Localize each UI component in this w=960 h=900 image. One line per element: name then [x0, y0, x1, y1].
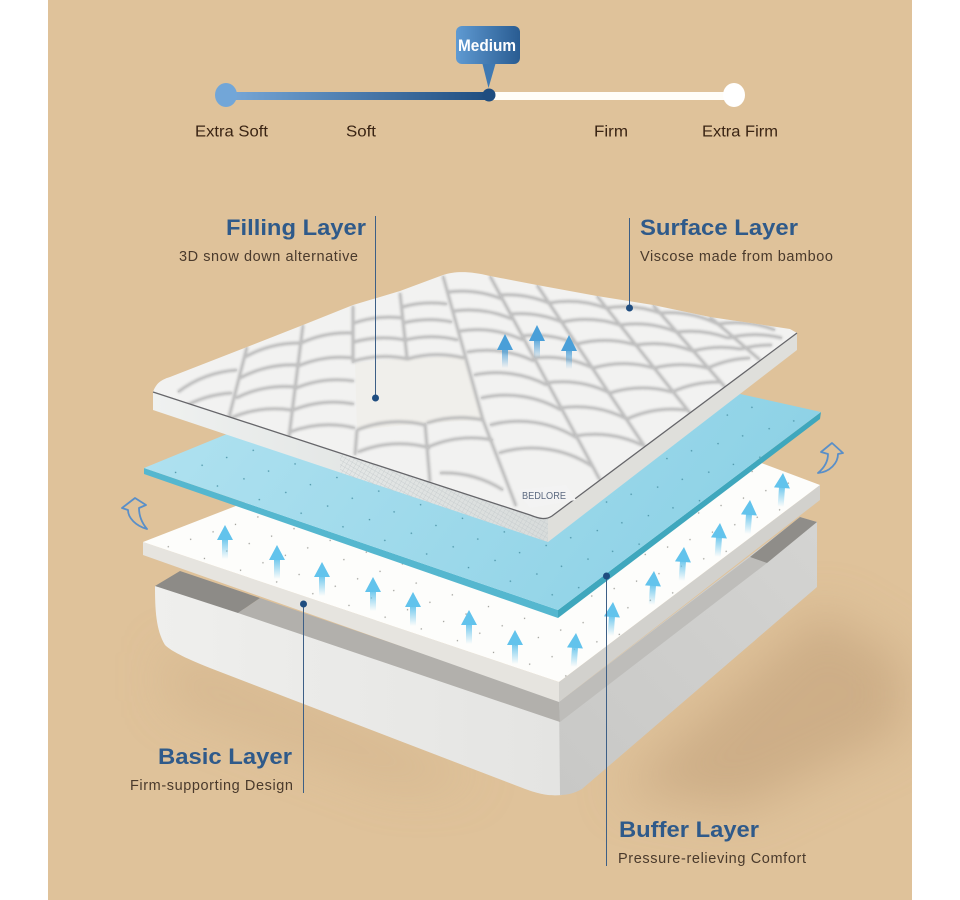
callout: surface layer: Surface Layer: [640, 215, 798, 240]
callout: buffer layer: Buffer Layer: [619, 817, 759, 842]
firmness scale: [195, 26, 778, 140]
piping: [153, 333, 797, 519]
filling window: [355, 356, 483, 430]
ground shadow: [644, 616, 910, 812]
scale labels: Extra Firm: [702, 124, 778, 140]
medium callout: Medium: [458, 37, 516, 55]
callout: basic layer: [130, 600, 307, 794]
callout: surface layer: Viscose made from bamboo: [640, 249, 833, 265]
scale labels: [195, 124, 778, 140]
brand label: [515, 485, 576, 508]
callout: filling layer: [179, 215, 379, 402]
callout: surface layer: [626, 215, 833, 312]
scale labels: Soft: [346, 124, 377, 140]
blue gel foam layer: [144, 334, 821, 618]
callout: filling layer: 3D snow down alternative: [179, 249, 358, 265]
quilting seams: [178, 276, 782, 506]
callout: basic layer: Firm-supporting Design: [130, 778, 293, 794]
callout: buffer layer: Pressure-relieving Comfort: [618, 851, 806, 867]
base layer block: [155, 517, 817, 795]
brand label: BEDLORE: [522, 491, 566, 502]
curved arrow right: [818, 443, 843, 473]
white foam airflow arrows: [217, 472, 791, 667]
scale track: [215, 83, 745, 107]
curved arrow left: [122, 498, 147, 529]
scale labels: Firm: [594, 124, 628, 140]
callout: buffer layer: [603, 572, 806, 867]
grey support strip: [155, 517, 817, 722]
callout: basic layer: Basic Layer: [158, 744, 292, 769]
callout: filling layer: Filling Layer: [226, 215, 366, 240]
quilted surface topper: [153, 272, 797, 542]
topper side edges: [153, 332, 797, 542]
white foam layer: [143, 384, 820, 702]
scale labels: Extra Soft: [195, 124, 269, 140]
medium callout: [456, 26, 520, 88]
topper airflow arrows: [497, 325, 577, 369]
